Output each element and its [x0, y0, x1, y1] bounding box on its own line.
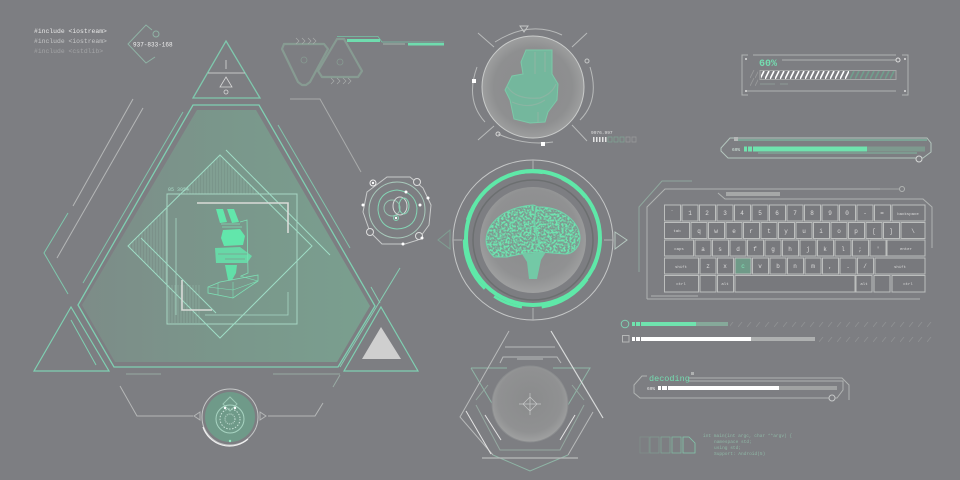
gauge hatch	[750, 70, 758, 86]
gauge frame	[742, 55, 908, 95]
key legends: \	[911, 228, 915, 235]
key legends: '	[876, 246, 880, 253]
direction arrows	[438, 230, 450, 249]
key legends: ,	[828, 263, 832, 270]
scan label: 05 3954	[168, 187, 189, 193]
key legends: i	[819, 228, 823, 235]
left corner triangle	[34, 307, 109, 371]
key legends: b	[776, 263, 780, 270]
header code text: #include <cstdlib>	[34, 48, 103, 55]
key legends: q	[697, 228, 701, 235]
key legends: s	[718, 246, 722, 253]
key legends	[670, 210, 919, 287]
brain scan dial	[438, 160, 627, 320]
key legends: 6	[775, 210, 779, 217]
key legends: /	[863, 263, 867, 270]
key legends: alt	[860, 282, 868, 287]
key legends: g	[771, 246, 775, 253]
key legends: ;	[858, 246, 862, 253]
knee readout	[591, 130, 636, 142]
knee readout: 9976.997	[591, 130, 613, 136]
key legends: .	[846, 263, 850, 270]
key legends: 5	[758, 210, 762, 217]
key legends: o	[837, 228, 841, 235]
knee model	[505, 50, 558, 123]
key legends: tab	[673, 229, 681, 234]
green progress capsule	[721, 137, 931, 162]
upper right guide line	[290, 99, 361, 172]
key legends: 4	[740, 210, 744, 217]
atom orbit diagram	[362, 177, 431, 246]
code comment text	[703, 433, 792, 457]
key legends: shift	[675, 265, 687, 270]
key legends: c	[741, 263, 745, 270]
white corner brackets	[182, 203, 288, 310]
outer ring	[453, 160, 613, 320]
square frame with hatching	[167, 194, 297, 324]
key legends: ctrl	[676, 282, 686, 287]
rotated diamonds	[128, 155, 312, 338]
panel outline	[78, 105, 375, 367]
gauge value: 60%	[759, 59, 777, 70]
header code text	[34, 28, 107, 55]
code comment text: Support: Android(5)	[714, 451, 765, 457]
white loading bar	[622, 336, 933, 342]
key legends: -	[863, 210, 867, 217]
brain model	[486, 205, 580, 279]
hatch panels	[128, 155, 260, 285]
key legends: 7	[793, 210, 797, 217]
keyboard panel	[639, 181, 932, 299]
decoding progress capsule: decoding	[649, 374, 690, 384]
right corner triangle	[340, 268, 418, 371]
lower accent lines	[126, 374, 340, 387]
key legends: x	[723, 263, 727, 270]
key legends: t	[767, 228, 771, 235]
left outer guide lines	[44, 99, 143, 294]
key legends: h	[788, 246, 792, 253]
top green status bars	[337, 36, 444, 46]
key legends: 9	[828, 210, 832, 217]
decoding progress capsule: 60%	[647, 386, 655, 392]
microscope	[208, 209, 258, 298]
star triangles	[471, 368, 590, 471]
key legends: m	[811, 263, 815, 270]
key legends: caps	[674, 248, 684, 252]
key legends: z	[706, 263, 710, 270]
key legends: f	[753, 246, 757, 253]
header code text: #include <iostream>	[34, 38, 107, 45]
bottom radial dial	[202, 389, 258, 446]
key legends: backspace	[897, 212, 919, 217]
key legends: 1	[688, 210, 692, 217]
key legends: shift	[894, 265, 906, 270]
key legends: n	[793, 263, 797, 270]
bottom left hatch	[168, 285, 200, 323]
decoding progress capsule	[634, 372, 849, 401]
code comment text: using std;	[714, 445, 741, 451]
key legends: 0	[845, 210, 849, 217]
knee joint scan orb	[472, 26, 593, 146]
key legends: k	[823, 246, 827, 253]
key legends: 2	[705, 210, 709, 217]
key legends: e	[732, 228, 736, 235]
hexagonal target panel	[460, 331, 603, 471]
inner thin corners	[176, 218, 288, 315]
twin rounded triangle icons	[282, 38, 362, 85]
key grid	[664, 205, 925, 292]
central orb	[480, 187, 586, 293]
crosshair	[519, 393, 541, 415]
panel fill	[82, 110, 370, 362]
parallel side lines	[83, 112, 350, 283]
key legends: r	[749, 228, 753, 235]
top right gauge	[742, 55, 908, 95]
orbital arcs and ticks	[472, 29, 593, 143]
hexagon lines	[460, 331, 593, 455]
key legends: j	[806, 246, 810, 253]
key legends: [	[872, 228, 876, 235]
key legends: 8	[810, 210, 814, 217]
key legends: v	[758, 263, 762, 270]
diamond id badge: 937-833-168	[133, 42, 173, 48]
green progress capsule: 60%	[732, 147, 740, 153]
gauge bar	[760, 70, 896, 80]
key legends: w	[714, 228, 718, 235]
key legends: alt	[721, 282, 729, 287]
bright green ring	[466, 171, 600, 305]
key legends: 3	[723, 210, 727, 217]
main triangular panel	[78, 105, 375, 367]
key legends: y	[784, 228, 788, 235]
key legends: d	[736, 246, 740, 253]
header code text: #include <iostream>	[34, 28, 107, 35]
key legends: l	[841, 246, 845, 253]
green loading bar	[621, 320, 933, 328]
file icon row	[640, 437, 695, 453]
key legends: =	[880, 210, 884, 217]
key legends: ]	[889, 228, 893, 235]
key legends: ctrl	[903, 282, 913, 287]
code comment text: namespace std;	[714, 439, 752, 445]
key legends: p	[854, 228, 858, 235]
bottom connector lines	[120, 386, 323, 420]
key legends: `	[670, 210, 674, 217]
code comment text: int main(int argc, char **argv) {	[703, 433, 792, 439]
key legends: u	[802, 228, 806, 235]
key legends: enter	[900, 247, 913, 252]
top triangle emblem	[193, 41, 260, 98]
keyboard frame	[639, 181, 932, 299]
diamond id badge	[128, 25, 173, 63]
key legends: a	[701, 246, 705, 253]
target orb	[492, 366, 568, 442]
